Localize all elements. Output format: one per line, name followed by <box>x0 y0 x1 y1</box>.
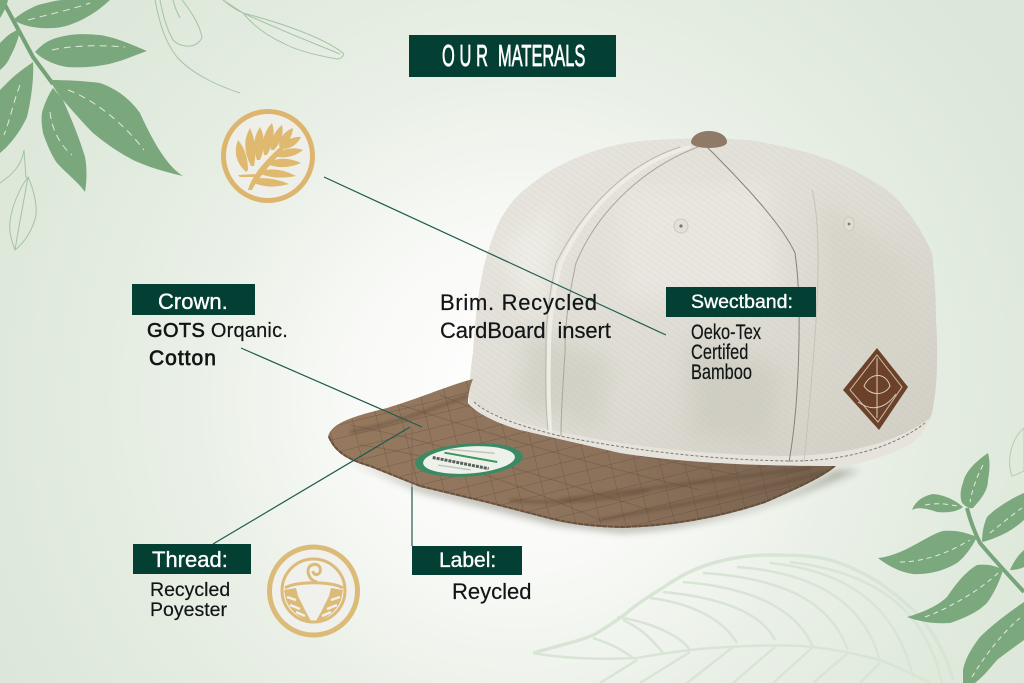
brim front edge <box>328 437 836 528</box>
hat crown <box>469 138 937 469</box>
thread text <box>150 579 230 621</box>
leader lines <box>213 177 666 546</box>
label tag: Label: <box>439 549 496 572</box>
callout: label <box>412 546 531 604</box>
callout: brim text <box>440 290 611 343</box>
callout: sweatband <box>666 287 816 384</box>
title: OUR <box>442 38 493 73</box>
crown eyelets <box>674 219 688 233</box>
leaf branch bottom-right <box>878 453 1024 683</box>
diamond leather patch <box>843 348 908 430</box>
hat shadow <box>345 458 860 533</box>
crown text <box>147 320 288 370</box>
sweatband label: Swectband: <box>691 291 793 313</box>
top button <box>691 131 727 148</box>
hat <box>320 131 937 540</box>
sweatband text: Oeko-Tex <box>691 321 761 344</box>
crown twill texture <box>469 138 937 469</box>
label tag <box>412 546 522 575</box>
crown text: GOTS Orqanic. <box>147 320 288 342</box>
thread label <box>133 544 251 574</box>
label text: Reycled <box>452 579 531 604</box>
callout: thread <box>133 544 251 621</box>
outline leaf right edge <box>1010 428 1024 476</box>
title <box>409 35 616 77</box>
crown mottling <box>500 180 915 445</box>
leaf branch top-left <box>0 0 183 192</box>
icon: palm leaf badge <box>224 112 312 200</box>
callout: crown <box>132 284 288 370</box>
outline leaves top-left <box>0 0 343 250</box>
crown label <box>132 284 255 315</box>
hat brim <box>328 379 836 528</box>
callout: brim text: CardBoard insert <box>440 318 611 343</box>
sweatband text: Certifed <box>691 341 748 364</box>
brim label sticker <box>414 440 524 480</box>
icon: thread badge <box>270 547 358 635</box>
sweatband text: Bamboo <box>691 361 752 384</box>
thread label: Thread: <box>152 547 228 572</box>
crown seams <box>474 146 925 462</box>
crown band <box>469 397 932 469</box>
title: MATERALS <box>498 38 585 73</box>
large pale leaf watermark <box>533 555 953 683</box>
callout: brim text: Brim. Recycled <box>440 290 598 315</box>
crown label: Crown. <box>158 289 228 314</box>
crown text: Cotton <box>149 347 217 370</box>
thread text: Recycled <box>150 579 230 601</box>
thread text: Poyester <box>150 599 227 621</box>
sweatband text <box>691 321 761 384</box>
sweatband label <box>666 287 816 317</box>
